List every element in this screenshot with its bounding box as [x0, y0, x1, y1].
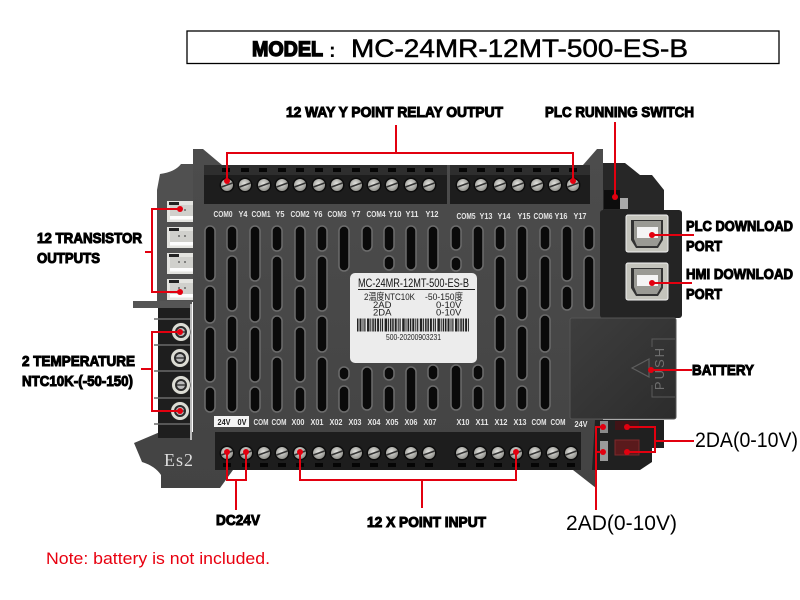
label: HMI download port: PORT [686, 287, 722, 303]
analog connector area [592, 420, 664, 470]
Es2 mark: Es2 [164, 450, 193, 470]
bottom screws [220, 446, 578, 460]
top terminal block right [450, 165, 590, 204]
battery cover: PUSH [652, 346, 667, 390]
top terminal labels: Y6 [314, 209, 323, 219]
top terminal labels: COM5 [456, 211, 476, 221]
top terminal labels: Y11 [406, 209, 419, 219]
top terminal labels: COM2 [290, 209, 310, 219]
leader: X point input [297, 449, 519, 508]
running switch [604, 190, 628, 209]
PLC device body [133, 149, 682, 488]
leader: temperature [141, 329, 183, 414]
product label sticker: MC-24MR-12MT-500-ES-B [358, 278, 469, 290]
top terminal labels: Y15 [518, 211, 531, 221]
product label sticker: 0-10V [436, 300, 462, 311]
bottom terminal labels: 24V [574, 419, 588, 429]
leader: PLC download port [649, 232, 694, 238]
bottom terminal labels: COM [254, 417, 268, 427]
top terminal labels: Y17 [574, 211, 587, 221]
bottom terminal labels: X02 [330, 417, 343, 427]
product label sticker [350, 273, 477, 363]
left temperature terminal [133, 301, 192, 440]
bottom terminal labels [214, 416, 588, 429]
bottom terminal labels: X01 [310, 417, 324, 427]
bottom terminal labels: COM [272, 417, 286, 427]
label: relay output: 12 WAY Y POINT RELAY OUTPUT [286, 105, 503, 121]
top terminal labels: Y13 [480, 211, 493, 221]
label: 2AD: 2AD(0-10V) [566, 512, 677, 535]
leader: 2AD [596, 424, 606, 510]
ventilation slots [210, 231, 589, 407]
top right module [598, 163, 664, 212]
top terminal labels: Y14 [498, 211, 511, 221]
label: temperature: NTC10K-(-50-150) [22, 374, 133, 390]
USB block [600, 210, 682, 318]
top terminal block left [204, 165, 447, 204]
title box [187, 31, 779, 64]
bottom terminal labels: COM [532, 417, 546, 427]
top terminal labels: Y7 [352, 209, 361, 219]
bottom terminal labels: X13 [514, 417, 527, 427]
leader: transistor outputs [145, 206, 183, 295]
USB ports [626, 215, 668, 300]
product label sticker: -50-150度 [425, 291, 463, 303]
note: Note: battery is not included. [46, 549, 270, 568]
top terminal labels: Y4 [238, 209, 248, 219]
bottom terminal labels: X11 [476, 417, 489, 427]
top terminal labels: COM6 [534, 211, 553, 221]
title box: : [329, 40, 336, 62]
title box: MODEL [252, 38, 323, 61]
label: temperature: 2 TEMPERATURE [22, 354, 135, 370]
product label sticker: 2AD [373, 300, 392, 311]
top terminal labels: COM1 [252, 209, 271, 219]
leader: battery [648, 367, 692, 373]
leader: DC24V [224, 449, 249, 510]
socket column [167, 201, 193, 300]
bottom terminal labels: X07 [424, 417, 437, 427]
bottom terminal labels: X05 [386, 417, 399, 427]
leader: HMI download port [649, 280, 692, 286]
bottom terminal labels: X03 [348, 417, 362, 427]
product label sticker: 2DA [373, 308, 392, 318]
product label sticker: 500-20200903231 [386, 332, 441, 342]
bottom terminal labels: COM [550, 417, 566, 427]
top terminal labels: COM0 [214, 209, 233, 219]
left side module [157, 164, 193, 302]
label: transistor outputs: OUTPUTS [37, 251, 100, 267]
top terminal labels: Y5 [276, 209, 285, 219]
top screws [220, 178, 580, 192]
label: HMI download port [686, 267, 793, 303]
leader: Y relay output [224, 125, 576, 184]
leader: 2DA [624, 424, 694, 455]
bottom terminal labels: 24V [218, 417, 231, 427]
label: PLC download port: PORT [686, 239, 722, 255]
bottom terminal labels: X12 [494, 417, 508, 427]
bottom terminal labels: X10 [456, 417, 470, 427]
top terminal labels: Y16 [554, 211, 568, 221]
label: temperature [22, 354, 135, 390]
product label sticker: 2温度NTC10K [364, 291, 416, 303]
bottom terminal labels: X06 [404, 417, 418, 427]
top terminal labels: COM4 [366, 209, 386, 219]
title box: MC-24MR-12MT-500-ES-B [351, 35, 688, 63]
bottom terminal labels: X04 [368, 417, 381, 427]
top terminal labels: Y10 [388, 209, 402, 219]
bottom terminal block [215, 432, 581, 470]
top terminal labels: COM3 [328, 209, 347, 219]
leader: running switch [612, 122, 618, 200]
bottom terminal labels: X00 [292, 417, 305, 427]
top terminal labels [214, 209, 587, 221]
label: running switch: PLC RUNNING SWITCH [545, 105, 694, 121]
bottom terminal labels: 0V [238, 417, 247, 427]
label: PLC download port [686, 219, 793, 255]
label: X point input: 12 X POINT INPUT [367, 515, 486, 531]
barcode [357, 318, 469, 332]
label: battery: BATTERY [692, 363, 754, 379]
label: DC24V: DC24V [216, 513, 260, 529]
top terminal labels: Y12 [426, 209, 439, 219]
label: transistor outputs [37, 231, 142, 267]
main housing [134, 149, 603, 488]
label: transistor outputs: 12 TRANSISTOR [37, 231, 142, 247]
product label sticker: 0-10V [436, 308, 462, 318]
battery cover [570, 318, 676, 419]
